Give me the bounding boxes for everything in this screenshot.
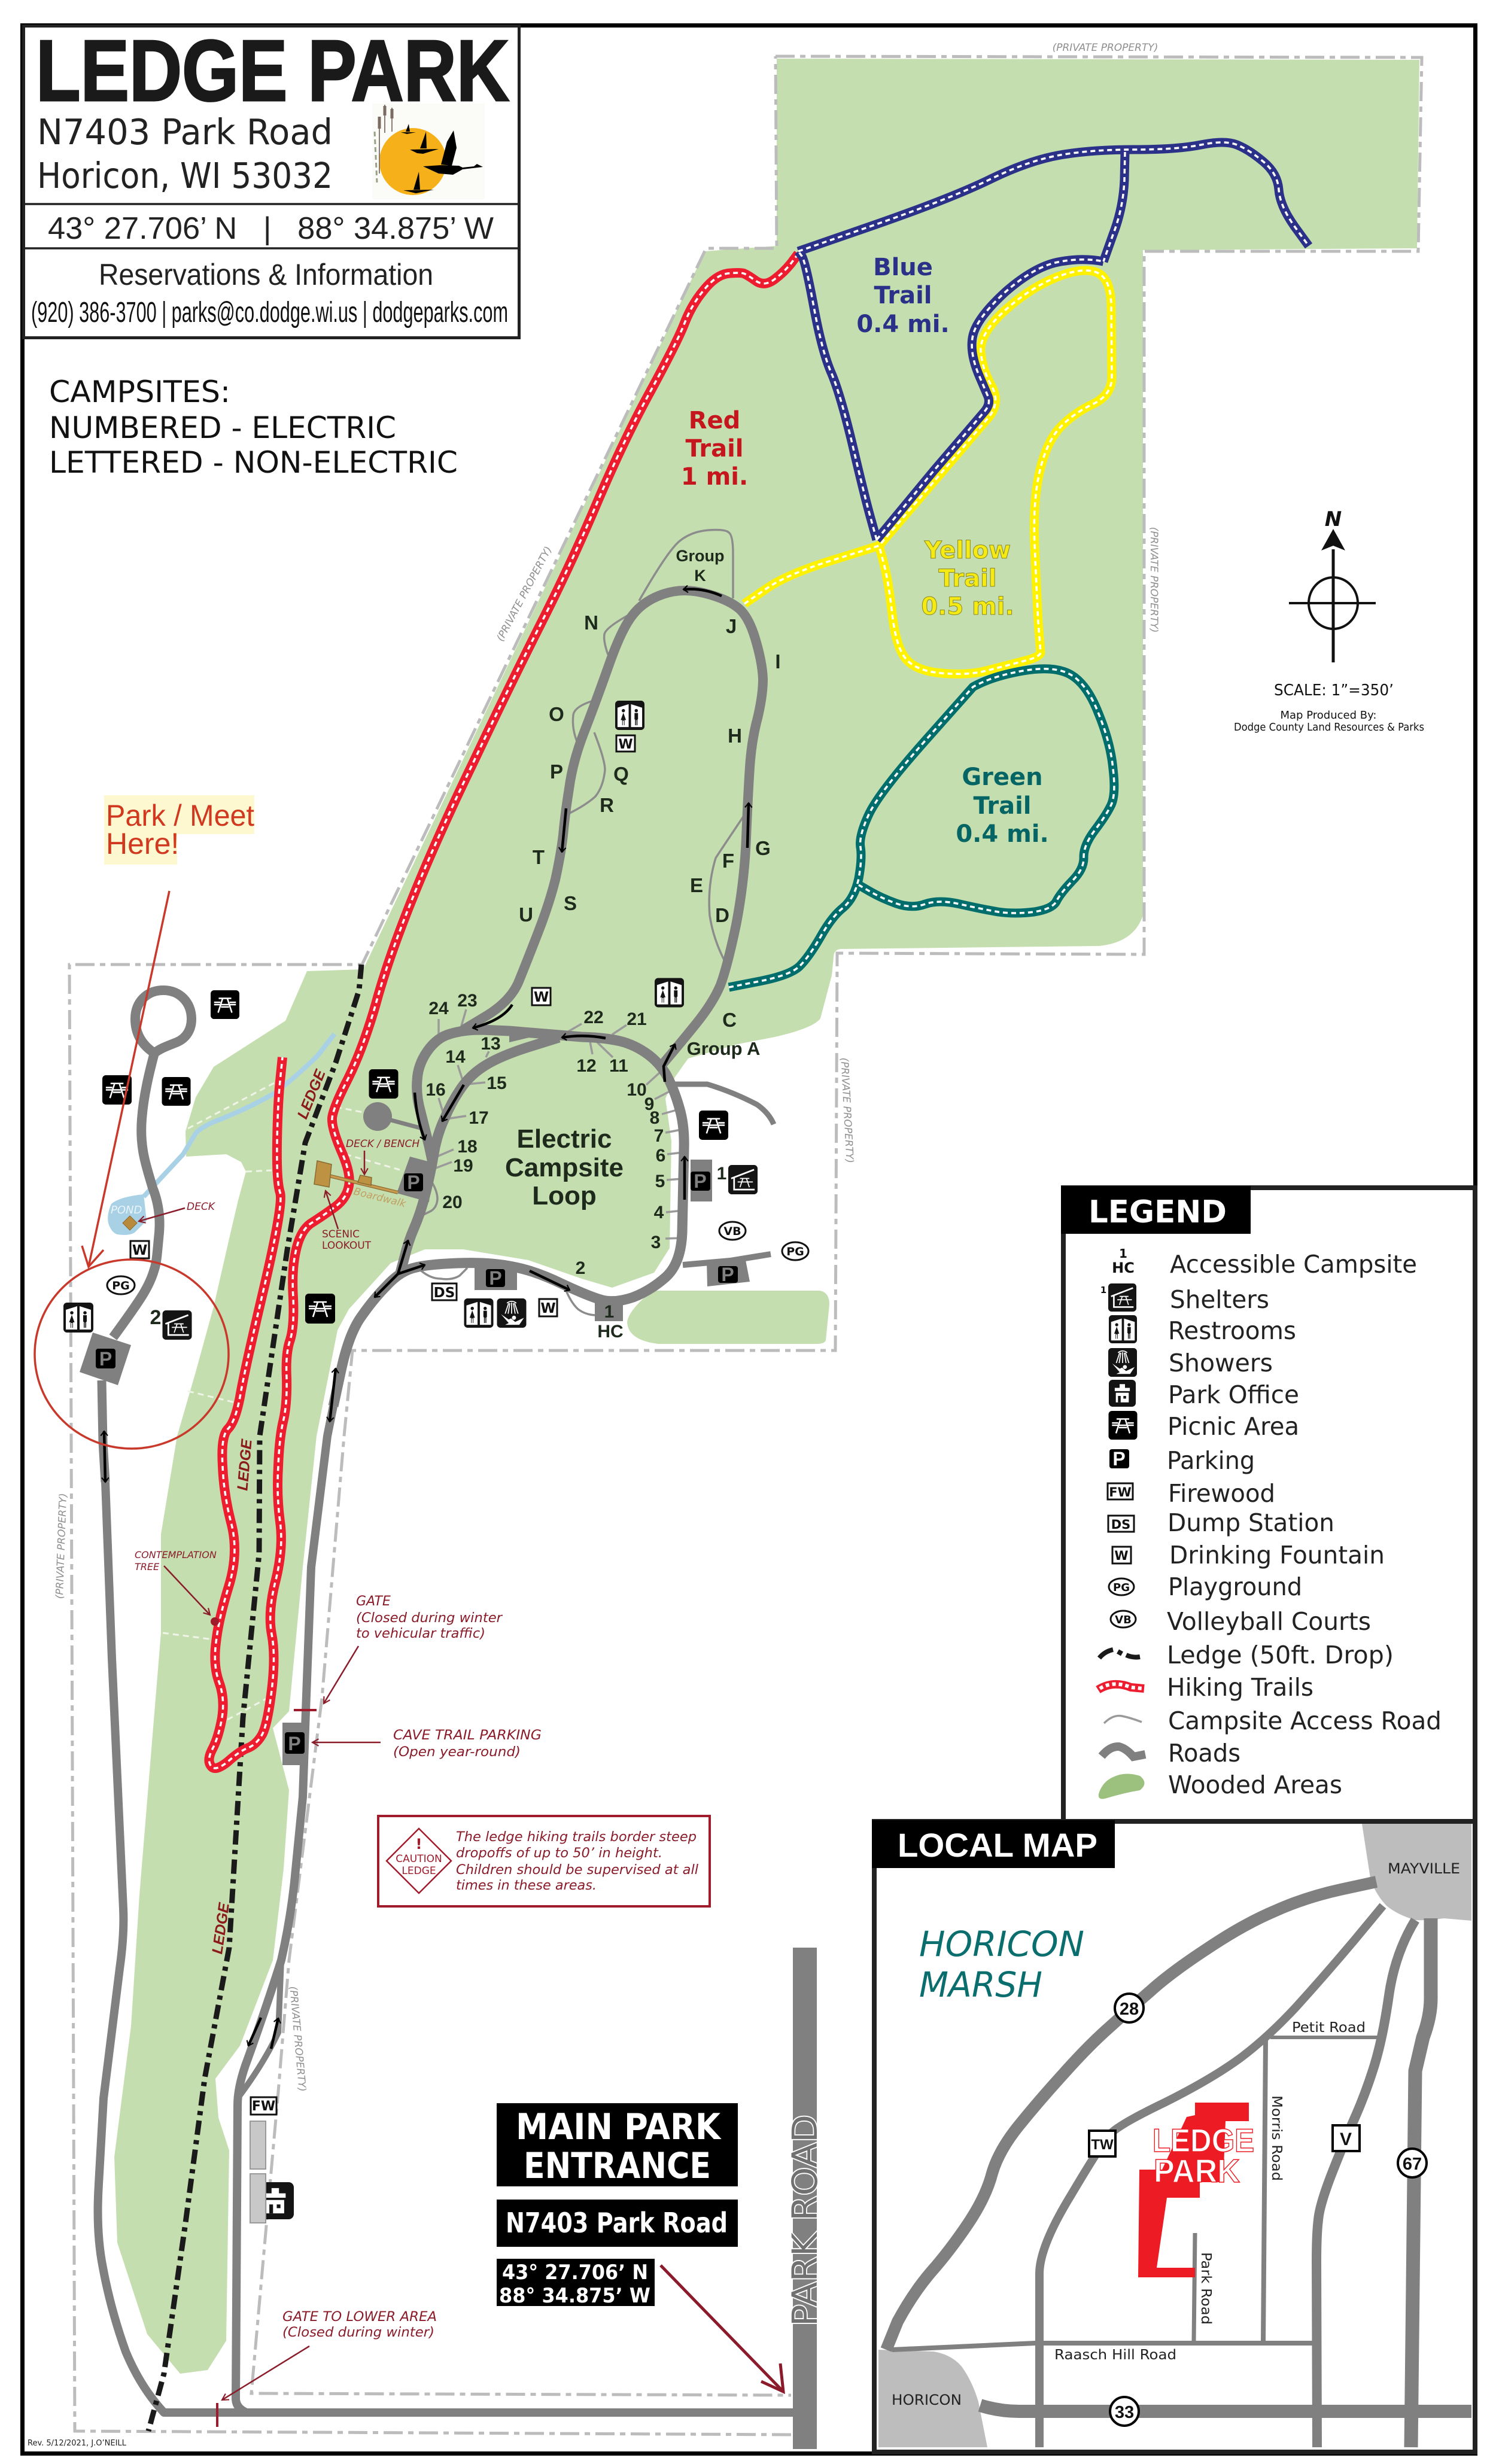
legend row: restrooms (1109, 1315, 1296, 1345)
campsite letters: S (564, 892, 577, 914)
icons: parking: P (99, 1348, 112, 1370)
ledge line (148, 965, 361, 2431)
icons: water, dump station, firewood (130, 735, 635, 2115)
gate callout (294, 1594, 503, 1710)
contemplation tree callout (135, 1549, 219, 1626)
highway shields: 33 (1115, 2403, 1134, 2422)
icons: shelters and office (163, 1165, 758, 2219)
campsite numbers (425, 991, 665, 1278)
caution callout: times in these areas. (456, 1878, 597, 1893)
coordinates: 43° 27.706’ N | 88° 34.875’ W (48, 211, 494, 246)
campsite letters: D (715, 904, 729, 926)
trail label: yellow: 0.5 mi. (921, 593, 1014, 620)
legend row: drinking fountain: Drinking Fountain (1169, 1541, 1385, 1569)
legend row: parking: P (1112, 1448, 1126, 1470)
trail label: blue: Trail (874, 282, 932, 309)
road labels (1054, 2020, 1366, 2363)
campsite numbers: 21 (627, 1009, 647, 1029)
legend row: campsite access road: Campsite Access Road (1168, 1706, 1442, 1735)
icons: water, dump station, firewood: FW (252, 2099, 275, 2114)
gate to lower area callout: GATE TO LOWER AREA (282, 2310, 437, 2325)
legend row: firewood: FW (1109, 1485, 1132, 1499)
trail label: yellow: Yellow (924, 537, 1011, 564)
campsite numbers: 11 (609, 1056, 628, 1076)
legend row: accessible campsite: Accessible Campsite (1170, 1250, 1417, 1279)
icons: parking: P (721, 1264, 734, 1285)
gate callout: (Closed during winter (356, 1611, 503, 1626)
town: mayville (1362, 1824, 1471, 1921)
legend row: accessible campsite: 1 (1119, 1246, 1127, 1261)
icons: playground and volleyball (107, 1222, 808, 1294)
icons: water, dump station, firewood: W (132, 1243, 147, 1258)
trail: red (209, 254, 798, 1768)
electric campsite loop label: Loop (532, 1181, 597, 1210)
trail label: blue (856, 254, 950, 338)
campsite letters: O (549, 703, 564, 725)
campsite letters: N (584, 612, 598, 634)
caution callout: Children should be supervised at all (456, 1863, 698, 1878)
campsite letters (519, 547, 781, 1059)
legend row: picnic area: Picnic Area (1167, 1412, 1299, 1441)
campsite numbers: 8 (650, 1108, 659, 1128)
campsite letters: U (519, 904, 533, 926)
site 1 and HC label: 2 (150, 1306, 161, 1329)
caution callout: CAUTION (396, 1853, 442, 1865)
highway shields (1089, 1994, 1427, 2426)
campsite numbers: 13 (481, 1034, 501, 1054)
trail label: red (681, 407, 748, 491)
trail label: blue: 0.4 mi. (856, 311, 950, 338)
electric campsite loop label (505, 1124, 624, 1210)
legend heading (1061, 1186, 1251, 1234)
highway shields: 28 (1120, 2000, 1139, 2019)
campsite numbers: 9 (644, 1094, 654, 1114)
icons: parking (96, 1170, 738, 1754)
road labels: Petit Road (1292, 2020, 1366, 2036)
legend row: hiking trails: Hiking Trails (1167, 1673, 1313, 1702)
panel: title block (24, 22, 519, 337)
ledge park location (1138, 2103, 1254, 2277)
road labels: Raasch Hill Road (1054, 2347, 1176, 2363)
cross-connector footpaths (163, 1082, 400, 1724)
campsite numbers: 12 (576, 1056, 597, 1076)
ledge labels (209, 1067, 329, 1955)
main park entrance callout: 88° 34.875’ W (499, 2284, 650, 2308)
icons: parking: P (694, 1170, 707, 1192)
legend row: park office (1109, 1380, 1299, 1409)
private property labels: (PRIVATE PROPERTY) (494, 544, 555, 643)
legend row: picnic area (1108, 1411, 1299, 1441)
main park entrance callout: 43° 27.706’ N (502, 2261, 648, 2284)
legend row: roads (1102, 1739, 1240, 1768)
site 1 and HC label: 1 (604, 1302, 614, 1322)
caution callout: dropoffs of up to 50’ in height. (456, 1846, 662, 1861)
campsite letters: E (690, 874, 703, 896)
wooded area: southeast patch (627, 1291, 829, 1344)
icons: water, dump station, firewood: W (534, 990, 549, 1005)
trail label: yellow (921, 537, 1014, 620)
campsite letters: P (550, 761, 563, 783)
local map heading (872, 1820, 1115, 1868)
campsite numbers: 17 (469, 1108, 489, 1128)
main park entrance callout: ENTRANCE (524, 2145, 711, 2187)
campsite numbers: 15 (486, 1073, 507, 1093)
caution callout: ! (416, 1836, 422, 1852)
boardwalk and scenic lookout: LOOKOUT (322, 1240, 372, 1252)
legend row: parking (1109, 1446, 1255, 1475)
caution callout: LEDGE (402, 1865, 436, 1877)
gate to lower area callout: (Closed during winter) (282, 2325, 434, 2340)
trail label: green: Trail (973, 792, 1032, 820)
firewood storage rectangles (250, 2121, 266, 2223)
ledge park location: LEDGE (1153, 2122, 1254, 2159)
trail: blue (798, 142, 1309, 540)
campsite numbers: 7 (654, 1126, 664, 1146)
icons: restrooms and showers (63, 701, 684, 1333)
compass and scale: N (1325, 507, 1342, 531)
icons: water, dump station, firewood: W (618, 737, 633, 752)
icon: sun and geese logo (372, 104, 485, 199)
electric campsite loop label: Campsite (505, 1153, 624, 1182)
legend row: shelters: 1 (1100, 1285, 1106, 1295)
horicon marsh label: HORICON (919, 1924, 1084, 1964)
campsite numbers: 22 (583, 1008, 604, 1027)
icons: water, dump station, firewood: W (540, 1301, 556, 1316)
main park entrance callout: MAIN PARK (516, 2106, 722, 2148)
campsite letters: I (775, 650, 781, 673)
campsite letters: G (755, 837, 771, 859)
highway shields: 67 (1403, 2155, 1422, 2174)
legend row: drinking fountain: W (1114, 1549, 1129, 1563)
campsite letters: F (722, 850, 734, 872)
caution callout: The ledge hiking trails border steep (456, 1830, 697, 1845)
icons: playground and volleyball: VB (723, 1225, 741, 1238)
cave trail parking callout (312, 1728, 542, 1760)
private property labels: (PRIVATE PROPERTY) (54, 1493, 69, 1599)
legend row: firewood: Firewood (1168, 1479, 1275, 1508)
pond deck callout: DECK (187, 1201, 216, 1213)
legend row: dump station: DS (1111, 1517, 1130, 1532)
campsite numbers: 23 (457, 991, 478, 1011)
legend row: hiking trails (1098, 1673, 1313, 1702)
road labels: Park Road (1198, 2252, 1214, 2325)
gate to lower area callout (217, 2310, 437, 2427)
campsite letters: C (722, 1009, 737, 1031)
legend row: firewood (1108, 1479, 1275, 1508)
reservations heading: Reservations & Information (99, 258, 433, 291)
trail label: green (956, 763, 1049, 848)
campsite numbers: 4 (654, 1203, 664, 1222)
ledge labels: LEDGE (294, 1067, 329, 1121)
campsite key text (49, 375, 458, 480)
compass and scale: Map Produced By: (1281, 709, 1376, 722)
campsite numbers: 6 (656, 1146, 665, 1166)
trail: yellow (744, 270, 1112, 674)
campsite letters: J (726, 615, 737, 637)
panel: legend (1061, 1186, 1475, 1821)
boardwalk and scenic lookout: SCENIC (322, 1228, 360, 1240)
address: N7403 Park Road (37, 111, 333, 153)
traffic direction arrows (104, 589, 749, 2049)
legend row: restrooms: Restrooms (1168, 1316, 1296, 1345)
legend row: shelters: Shelters (1170, 1285, 1269, 1314)
legend row: shelters (1100, 1283, 1269, 1314)
address: Horicon, WI 53032 (37, 155, 333, 196)
legend row: playground (1109, 1572, 1302, 1601)
compass and scale: SCALE: 1”=350’ (1274, 682, 1394, 699)
boardwalk and scenic lookout: DECK / BENCH (346, 1138, 419, 1150)
legend row: playground: Playground (1168, 1572, 1302, 1601)
caution callout (378, 1816, 710, 1906)
ledge labels: LEDGE (234, 1438, 256, 1491)
ledge park location: PARK (1154, 2152, 1240, 2189)
campsite letters: Group (676, 547, 724, 565)
site 1 and HC label: HC (597, 1322, 624, 1341)
site 1 and HC label (150, 1164, 726, 1341)
private property labels: (PRIVATE PROPERTY) (287, 1986, 308, 2092)
campsite key text: NUMBERED - ELECTRIC (49, 410, 396, 445)
cave trail parking callout: (Open year-round) (393, 1745, 521, 1760)
trail label: red: 1 mi. (681, 463, 748, 491)
private property labels: (PRIVATE PROPERTY) (838, 1057, 856, 1164)
horicon marsh label: MARSH (919, 1964, 1042, 2005)
campsite letters: Group A (687, 1038, 760, 1059)
town: horicon (878, 2350, 987, 2447)
park roads (80, 591, 817, 2449)
boardwalk and scenic lookout (314, 1138, 419, 1252)
legend row: roads: Roads (1168, 1739, 1240, 1768)
highway shields: V (1340, 2130, 1352, 2149)
icons: playground and volleyball: PG (786, 1245, 804, 1258)
contact line: (920) 386-3700 | parks@co.dodge.wi.us | dodgeparks.com (31, 297, 508, 328)
electric campsite loop label: Electric (517, 1124, 612, 1154)
trail label: green: Green (962, 763, 1043, 791)
campsite numbers: 19 (453, 1156, 473, 1176)
pond label: POND (111, 1204, 142, 1216)
local roads (886, 1882, 1471, 2447)
main park entrance callout: N7403 Park Road (506, 2207, 728, 2239)
campsite key text: CAMPSITES: (49, 375, 230, 409)
icons: parking: P (407, 1172, 420, 1193)
trail label: red: Red (689, 407, 740, 434)
icons: parking: P (288, 1733, 301, 1754)
campsite letters: T (533, 846, 545, 868)
gate callout: to vehicular traffic) (356, 1626, 485, 1641)
road labels: Morris Road (1269, 2095, 1284, 2181)
trail label: red: Trail (685, 435, 744, 463)
site 1 and HC label: 1 (717, 1164, 726, 1184)
legend row: accessible campsite: HC (1112, 1260, 1135, 1276)
campsite numbers: 18 (457, 1137, 478, 1157)
campsite numbers: 16 (425, 1080, 446, 1100)
main park entrance callout (497, 2103, 783, 2392)
boardwalk and scenic lookout: Boardwalk (352, 1185, 408, 1210)
legend row: dump station: Dump Station (1167, 1508, 1334, 1537)
campsite numbers: 14 (445, 1047, 466, 1067)
campsite numbers: 3 (651, 1233, 661, 1252)
pond deck callout (123, 1201, 216, 1230)
ledge labels: LEDGE (209, 1901, 233, 1955)
park road label: PARK ROAD (785, 2115, 825, 2326)
legend heading: LEGEND (1088, 1194, 1227, 1230)
legend row: parking: Parking (1167, 1446, 1255, 1475)
park name: LEDGE PARK (36, 22, 509, 119)
legend row: wooded areas: Wooded Areas (1168, 1771, 1342, 1799)
campsite numbers: 24 (428, 999, 449, 1018)
legend row: playground: PG (1113, 1581, 1130, 1594)
campsite access roads (421, 530, 744, 1315)
town: mayville: MAYVILLE (1388, 1860, 1460, 1877)
icons: picnic areas (102, 990, 728, 1324)
trail label: yellow: Trail (938, 565, 997, 592)
campsite letters: Q (613, 763, 629, 785)
campsite numbers: 5 (655, 1172, 665, 1191)
legend row: volleyball courts: Volleyball Courts (1167, 1607, 1371, 1636)
legend row: ledge: Ledge (50ft. Drop) (1167, 1641, 1394, 1669)
legend row: park office: Park Office (1168, 1380, 1299, 1409)
panel: local map (872, 1820, 1475, 2452)
campsite letters: H (728, 725, 742, 747)
compass and scale: Dodge County Land Resources & Parks (1234, 721, 1424, 734)
campsite key text: LETTERED - NON-ELECTRIC (49, 445, 458, 480)
private property labels: (PRIVATE PROPERTY) (1053, 42, 1158, 54)
park / meet here callout (35, 795, 254, 1449)
campsite letters: K (694, 567, 706, 585)
revision note: Rev. 5/12/2021, J.O’NEILL (28, 2439, 127, 2448)
legend row: volleyball courts: VB (1115, 1614, 1132, 1626)
highway shields: TW (1091, 2137, 1114, 2153)
icons: playground and volleyball: PG (112, 1279, 130, 1292)
private property labels (54, 42, 1160, 2092)
icons: parking: P (489, 1267, 502, 1289)
trail: green (729, 669, 1114, 987)
gate callout: GATE (356, 1594, 391, 1609)
town: horicon: HORICON (892, 2392, 962, 2408)
icons: water, dump station, firewood: DS (434, 1285, 455, 1301)
park road main (793, 1948, 817, 2449)
local map heading: LOCAL MAP (898, 1826, 1097, 1864)
campsite numbers: 2 (576, 1258, 585, 1278)
cave trail parking callout: CAVE TRAIL PARKING (393, 1728, 542, 1743)
compass and scale (1234, 507, 1424, 734)
stream and pond (108, 1034, 335, 1235)
contemplation tree callout: CONTEMPLATION (135, 1549, 217, 1560)
campsite numbers: 20 (442, 1193, 463, 1212)
trail label: green: 0.4 mi. (956, 820, 1049, 848)
private property labels: (PRIVATE PROPERTY) (1148, 527, 1160, 632)
contemplation tree callout: TREE (135, 1561, 160, 1572)
legend row: showers (1108, 1348, 1273, 1377)
address (37, 111, 333, 196)
trail label: blue: Blue (873, 254, 933, 281)
campsite numbers: 10 (627, 1080, 647, 1100)
horicon marsh label (919, 1924, 1084, 2005)
park / meet here callout: Here! (106, 827, 179, 860)
legend row: showers: Showers (1169, 1349, 1273, 1377)
park / meet here callout: Park / Meet (106, 799, 254, 832)
campsite letters: R (600, 794, 614, 816)
